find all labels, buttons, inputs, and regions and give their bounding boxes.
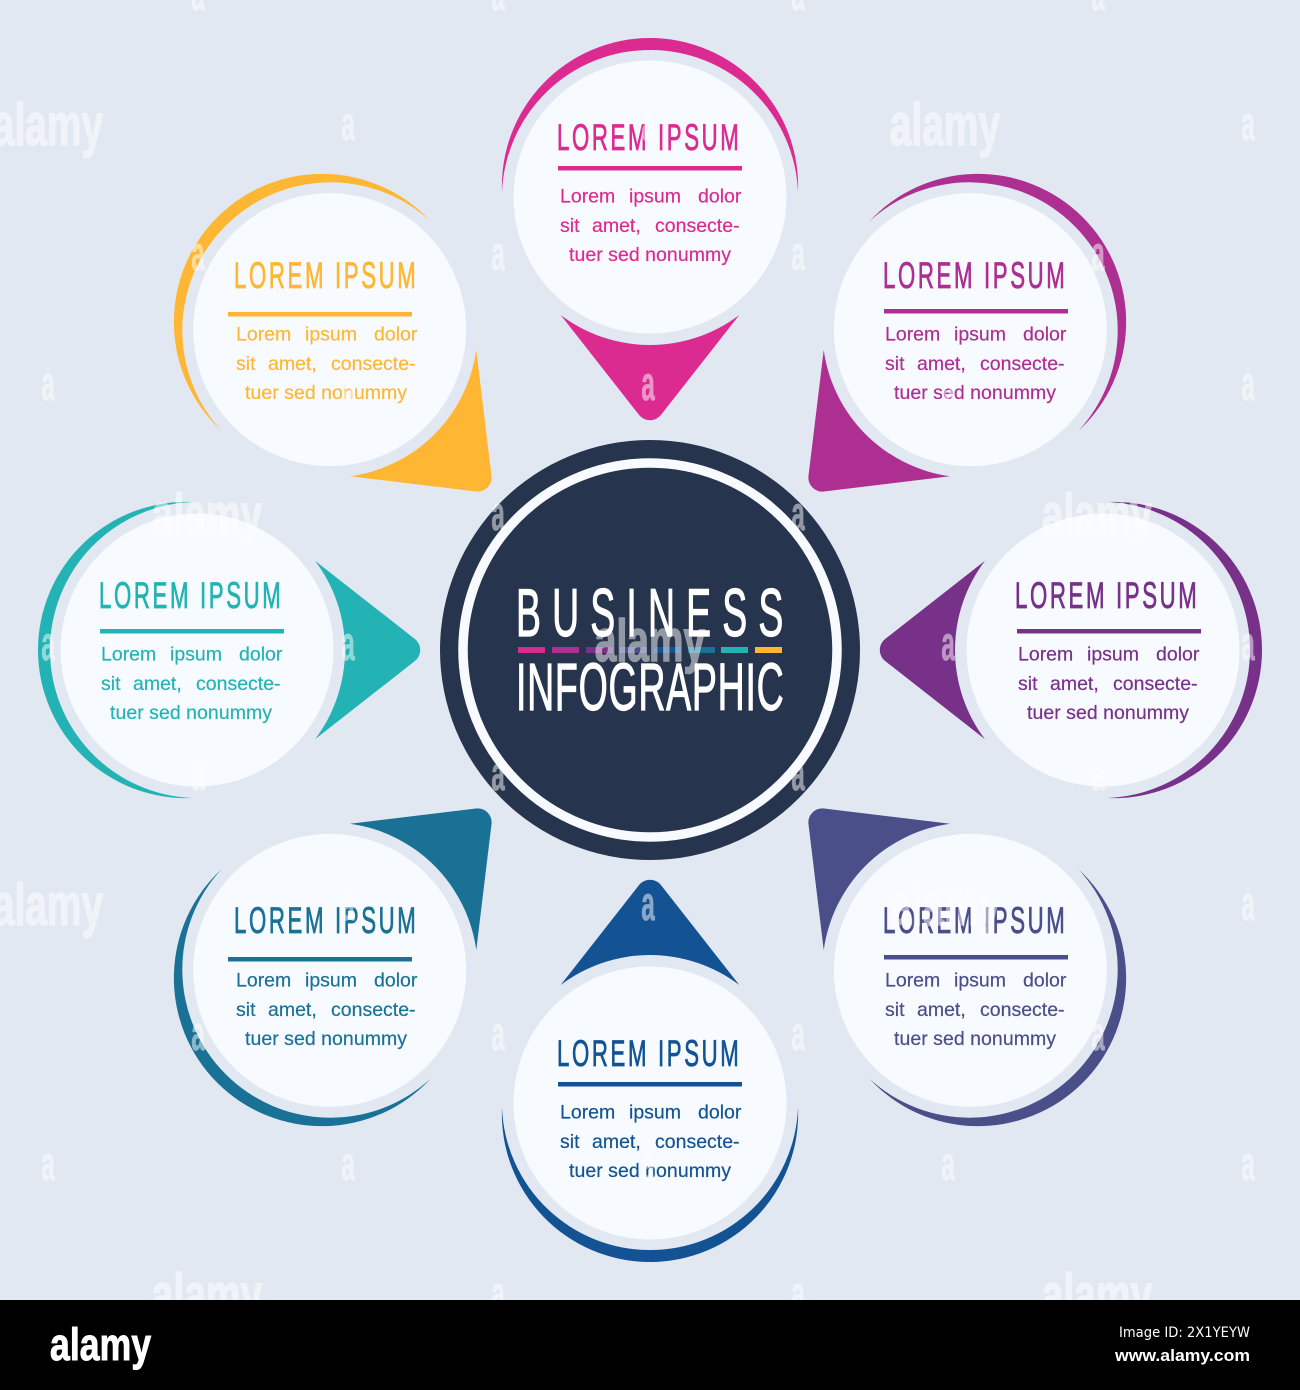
watermark pattern: a <box>791 1268 805 1321</box>
watermark pattern: a <box>1091 1008 1105 1061</box>
heading and text: indigo: consecte- <box>980 999 1065 1021</box>
heading and text: teal blue: tuer sed nonummy <box>245 1028 407 1050</box>
watermark pattern: a <box>941 1138 955 1191</box>
watermark pattern: a <box>491 748 505 801</box>
heading and text: teal blue <box>234 900 418 1050</box>
rule: purple <box>1017 629 1201 634</box>
heading and text: blue: ipsum <box>629 1102 681 1124</box>
heading and text: purple: ipsum <box>1087 644 1139 666</box>
watermark pattern: a <box>1241 618 1255 671</box>
heading and text: indigo: ipsum <box>954 970 1006 992</box>
heading and text: indigo: dolor <box>1023 970 1067 992</box>
watermark pattern: a <box>1091 748 1105 801</box>
watermark pattern: a <box>191 1008 205 1061</box>
heading and text: blue: consecte- <box>655 1131 740 1153</box>
heading and text: blue: LOREM IPSUM <box>557 1033 739 1074</box>
heading and text: magenta: Lorem <box>885 324 940 346</box>
watermark pattern: alamy <box>890 872 1000 938</box>
rule: pink <box>558 166 742 170</box>
watermark pattern: a <box>791 488 805 541</box>
watermark pattern: alamy <box>1042 482 1152 548</box>
watermark pattern: a <box>791 748 805 801</box>
heading and text: pink: Lorem <box>560 186 615 208</box>
heading and text: teal: ipsum <box>170 644 222 666</box>
heading and text: teal blue: sit <box>236 999 256 1021</box>
watermark pattern: a <box>191 228 205 281</box>
heading and text: magenta <box>883 255 1067 404</box>
pin shape: teal blue <box>113 708 592 1187</box>
heading and text: blue: sit <box>560 1131 580 1153</box>
heading and text: pink: ipsum <box>629 186 681 208</box>
heading and text: purple: dolor <box>1156 644 1200 666</box>
pin shape: purple <box>880 502 1262 798</box>
heading and text: pink: consecte- <box>655 215 740 237</box>
panel: top left yellow <box>113 113 592 592</box>
heading and text: indigo: Lorem <box>885 970 940 992</box>
heading and text: teal blue: amet, <box>268 999 317 1021</box>
panel: bottom right indigo <box>708 708 1187 1187</box>
watermark pattern: a <box>941 618 955 671</box>
heading and text: pink: sit <box>560 215 580 237</box>
heading and text: teal: dolor <box>239 644 283 666</box>
watermark pattern: a <box>491 1008 505 1061</box>
watermark pattern: a <box>491 488 505 541</box>
heading and text: yellow: sit <box>236 353 256 375</box>
heading and text: purple: LOREM IPSUM <box>1015 575 1197 616</box>
center circle <box>440 440 860 860</box>
rule: indigo <box>884 955 1068 960</box>
heading and text: yellow: LOREM IPSUM <box>234 255 416 296</box>
heading and text: blue: dolor <box>698 1102 742 1124</box>
center ring <box>463 463 837 837</box>
watermark pattern: a <box>41 618 55 671</box>
heading and text: purple: amet, <box>1050 673 1099 695</box>
heading and text: teal blue: LOREM IPSUM <box>234 900 416 941</box>
footer image id: Image ID: 2X1YEYW <box>1119 1325 1250 1341</box>
watermark pattern: a <box>1091 228 1105 281</box>
watermark pattern: alamy <box>152 482 262 548</box>
heading and text: teal: sit <box>101 673 121 695</box>
rule: blue <box>558 1082 742 1086</box>
heading and text: purple: Lorem <box>1018 644 1073 666</box>
watermark pattern: a <box>41 1138 55 1191</box>
panel: left teal <box>38 502 420 798</box>
heading and text: blue: Lorem <box>560 1102 615 1124</box>
heading and text: magenta: sit <box>885 353 905 375</box>
heading and text: pink: tuer sed nonummy <box>569 244 731 266</box>
heading and text: yellow <box>234 255 418 404</box>
panel: right purple <box>880 502 1262 798</box>
heading and text: teal: LOREM IPSUM <box>99 575 281 616</box>
heading and text: magenta: tuer sed nonummy <box>894 382 1056 404</box>
heading and text: teal: amet, <box>133 673 182 695</box>
watermark pattern: a <box>1241 98 1255 151</box>
heading and text: indigo <box>883 900 1067 1050</box>
watermark pattern: a <box>641 1138 655 1191</box>
heading and text: yellow: consecte- <box>331 353 416 375</box>
heading and text: teal <box>99 575 283 724</box>
center badge <box>440 440 860 860</box>
rule: yellow <box>228 312 412 316</box>
heading and text: pink: amet, <box>592 215 641 237</box>
heading and text: blue: tuer sed nonummy <box>569 1160 731 1182</box>
watermark pattern: alamy <box>890 92 1000 158</box>
heading and text: indigo: amet, <box>917 999 966 1021</box>
heading and text: blue: amet, <box>592 1131 641 1153</box>
watermark pattern: a <box>791 228 805 281</box>
watermark pattern: a <box>641 878 655 931</box>
heading and text: magenta: ipsum <box>954 324 1006 346</box>
watermark pattern: a <box>1241 358 1255 411</box>
heading and text: pink: LOREM IPSUM <box>557 117 739 158</box>
watermark pattern: a <box>341 618 355 671</box>
watermark pattern: a <box>641 358 655 411</box>
watermark pattern: a <box>341 878 355 931</box>
watermark pattern: a <box>1241 1138 1255 1191</box>
pin shape: magenta <box>708 113 1187 592</box>
heading and text: teal: consecte- <box>196 673 281 695</box>
rule: magenta <box>884 309 1068 314</box>
watermark pattern: a <box>41 358 55 411</box>
heading and text: pink: dolor <box>698 186 742 208</box>
watermark pattern: a <box>191 748 205 801</box>
heading and text: teal: tuer sed nonummy <box>110 702 272 724</box>
watermark pattern: a <box>641 98 655 151</box>
heading and text: yellow: ipsum <box>305 324 357 346</box>
heading and text: pink <box>557 117 742 266</box>
panel: top pink <box>502 38 798 420</box>
heading and text: magenta: amet, <box>917 353 966 375</box>
watermark pattern: a <box>1241 878 1255 931</box>
footer url: www.alamy.com <box>1114 1346 1250 1365</box>
watermark pattern: a <box>491 1268 505 1321</box>
heading and text: indigo: sit <box>885 999 905 1021</box>
panel: bottom left teal blue <box>113 708 592 1187</box>
heading and text: teal blue: consecte- <box>331 999 416 1021</box>
pin shape: blue <box>502 880 798 1262</box>
heading and text: teal: Lorem <box>101 644 156 666</box>
rule: teal <box>100 629 284 634</box>
heading and text: purple: tuer sed nonummy <box>1027 702 1189 724</box>
heading and text: magenta: consecte- <box>980 353 1065 375</box>
pin shape: indigo <box>708 708 1187 1187</box>
title: business: BUSINESS <box>516 574 783 651</box>
watermark pattern: a <box>491 228 505 281</box>
title: infographic: INFOGRAPHIC <box>516 650 784 725</box>
footer logo: alamy <box>50 1319 152 1370</box>
heading and text: yellow: dolor <box>374 324 418 346</box>
panel: top right magenta <box>708 113 1187 592</box>
heading and text: magenta: dolor <box>1023 324 1067 346</box>
heading and text: blue <box>557 1033 742 1182</box>
watermark pattern: a <box>341 358 355 411</box>
pin shape: pink <box>502 38 798 420</box>
heading and text: purple: sit <box>1018 673 1038 695</box>
heading and text: teal blue: ipsum <box>305 970 357 992</box>
pin shape: yellow <box>113 113 592 592</box>
rule: teal blue <box>228 957 412 962</box>
heading and text: yellow: tuer sed nonummy <box>245 382 407 404</box>
watermark pattern: a <box>341 1138 355 1191</box>
heading and text: yellow: amet, <box>268 353 317 375</box>
heading and text: teal blue: dolor <box>374 970 418 992</box>
heading and text: purple: consecte- <box>1113 673 1198 695</box>
watermark pattern: alamy <box>595 608 705 674</box>
heading and text: yellow: Lorem <box>236 324 291 346</box>
heading and text: indigo: tuer sed nonummy <box>894 1028 1056 1050</box>
watermark pattern: alamy <box>152 1262 262 1328</box>
heading and text: teal blue: Lorem <box>236 970 291 992</box>
heading and text: purple <box>1015 575 1200 724</box>
pin shape: teal <box>38 502 420 798</box>
watermark pattern: a <box>791 1008 805 1061</box>
heading and text: magenta: LOREM IPSUM <box>883 255 1065 296</box>
colour dashes <box>518 647 782 653</box>
panel: bottom blue <box>502 880 798 1262</box>
watermark pattern: a <box>941 358 955 411</box>
heading and text: indigo: LOREM IPSUM <box>883 900 1065 941</box>
watermark pattern: a <box>341 98 355 151</box>
footer bar <box>0 1300 1300 1390</box>
watermark pattern: alamy <box>1042 1262 1152 1328</box>
